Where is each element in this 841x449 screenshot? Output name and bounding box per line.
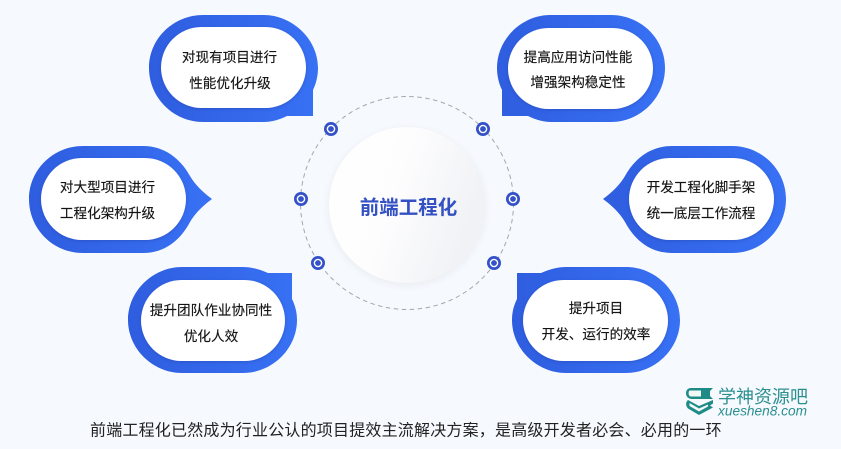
- bubble: top right: [497, 15, 665, 122]
- bubble: bottom left: 提升团队作业协同性: [150, 303, 272, 318]
- bubble: top left: 性能优化升级: [189, 76, 271, 91]
- bubble: bottom right: [512, 267, 680, 373]
- orbit node markers: [294, 122, 520, 270]
- bubble: middle right: [603, 146, 786, 253]
- bubble: middle right: 开发工程化脚手架: [647, 180, 755, 195]
- center title: 前端工程化: [360, 197, 457, 219]
- bubble: middle right: 统一底层工作流程: [647, 206, 756, 221]
- logo: book stack icon: [686, 388, 713, 415]
- logo: wordmark: xueshen8.com: [717, 404, 807, 418]
- logo: wordmark: [717, 387, 808, 418]
- bubble: top right: 增强架构稳定性: [530, 75, 626, 90]
- bubble: top left: [149, 15, 318, 122]
- dashed orbit ring: [300, 96, 514, 310]
- central circle: [327, 127, 487, 287]
- bubble: top right: 提高应用访问性能: [524, 49, 633, 65]
- bubble: top left: 对现有项目进行: [182, 50, 277, 65]
- bottom caption: 前端工程化已然成为行业公认的项目提效主流解决方案，是高级开发者必会、必用的一环: [90, 422, 722, 440]
- bubble: bottom left: [128, 267, 297, 373]
- bubble: bottom left: 优化人效: [184, 329, 239, 344]
- bubble: bottom right: 开发、运行的效率: [542, 326, 650, 342]
- bubble: middle left: [29, 146, 212, 253]
- bubble: middle left: 工程化架构升级: [60, 206, 155, 221]
- logo: wordmark: 学神资源吧: [718, 387, 808, 407]
- bubble: middle left: 对大型项目进行: [60, 180, 155, 195]
- bubble: bottom right: 提升项目: [569, 301, 623, 316]
